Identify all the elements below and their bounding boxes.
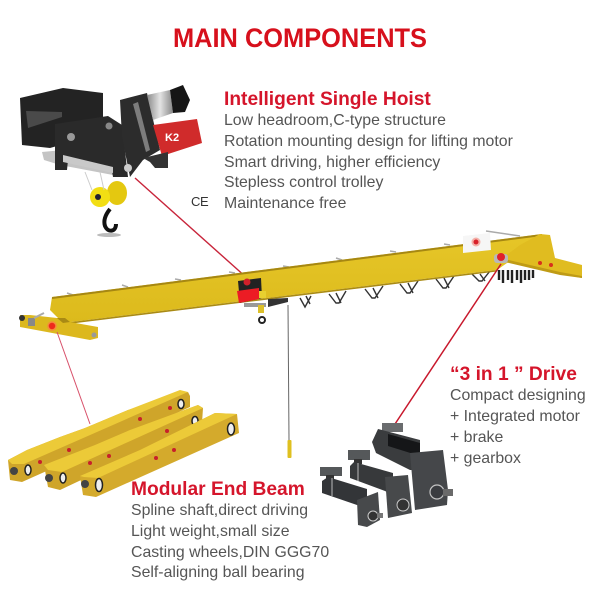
text block: drive features: Compact designing xyxy=(450,387,586,404)
text block: hoist features: Stepless control trolley xyxy=(224,174,383,191)
festoon cables xyxy=(300,270,533,307)
icon: end beams photo xyxy=(8,390,239,497)
drive marker on girder xyxy=(494,254,508,263)
right end beam xyxy=(500,234,582,278)
icon: CE mark xyxy=(191,194,209,209)
text block: hoist features: Rotation mounting design for lifting motor xyxy=(224,133,514,150)
icon: geared motors photo xyxy=(320,423,453,527)
icon: pendant control xyxy=(288,305,292,458)
text block: end beam features xyxy=(131,502,329,581)
icon: CE mark: E xyxy=(200,194,209,209)
trolley on girder xyxy=(238,278,262,303)
icon: hoist photo xyxy=(20,85,202,237)
text block: end beam features: Spline shaft,direct driving xyxy=(131,502,308,519)
text block: end beam features: Casting wheels,DIN GGG70 xyxy=(131,544,329,561)
main beam xyxy=(50,234,542,323)
text block: hoist features: Low headroom,C-type structure xyxy=(224,112,446,129)
large motor xyxy=(372,423,453,510)
icon: CE mark: C xyxy=(191,194,200,209)
beam front xyxy=(80,413,239,497)
mid motor xyxy=(348,450,412,518)
heading: intelligent single hoist: Intelligent Single Hoist xyxy=(224,89,431,110)
leader line: hoist xyxy=(135,178,247,278)
panel: modular end beam xyxy=(131,479,329,581)
heading: 3 in 1 drive: “3 in 1 ” Drive xyxy=(450,364,577,385)
panel: 3 in 1 drive xyxy=(450,364,586,467)
text block: end beam features: Self-aligning ball bearing xyxy=(131,564,305,581)
text block: drive features: + Integrated motor xyxy=(450,408,581,425)
text block: drive features: + brake xyxy=(450,429,503,446)
title: MAIN COMPONENTS xyxy=(173,23,427,53)
beam middle xyxy=(44,405,203,490)
text block: drive features: + gearbox xyxy=(450,450,521,467)
leader line: drive xyxy=(395,264,501,424)
small motor xyxy=(320,467,383,527)
icon: hoist photo: K2 xyxy=(165,132,179,144)
text block: end beam features: Light weight,small size xyxy=(131,523,290,540)
text block: drive features xyxy=(450,387,586,467)
text block: hoist features xyxy=(224,112,514,212)
left end beam xyxy=(20,315,98,340)
beam back xyxy=(8,390,190,482)
leader line: end beam xyxy=(57,332,90,424)
icon: label plate xyxy=(463,233,491,253)
icon: crane girder xyxy=(19,231,582,340)
text block: hoist features: Maintenance free xyxy=(224,195,347,212)
panel: intelligent single hoist xyxy=(224,89,514,212)
text block: hoist features: Smart driving, higher efficiency xyxy=(224,154,440,171)
heading: modular end beam: Modular End Beam xyxy=(131,479,305,500)
